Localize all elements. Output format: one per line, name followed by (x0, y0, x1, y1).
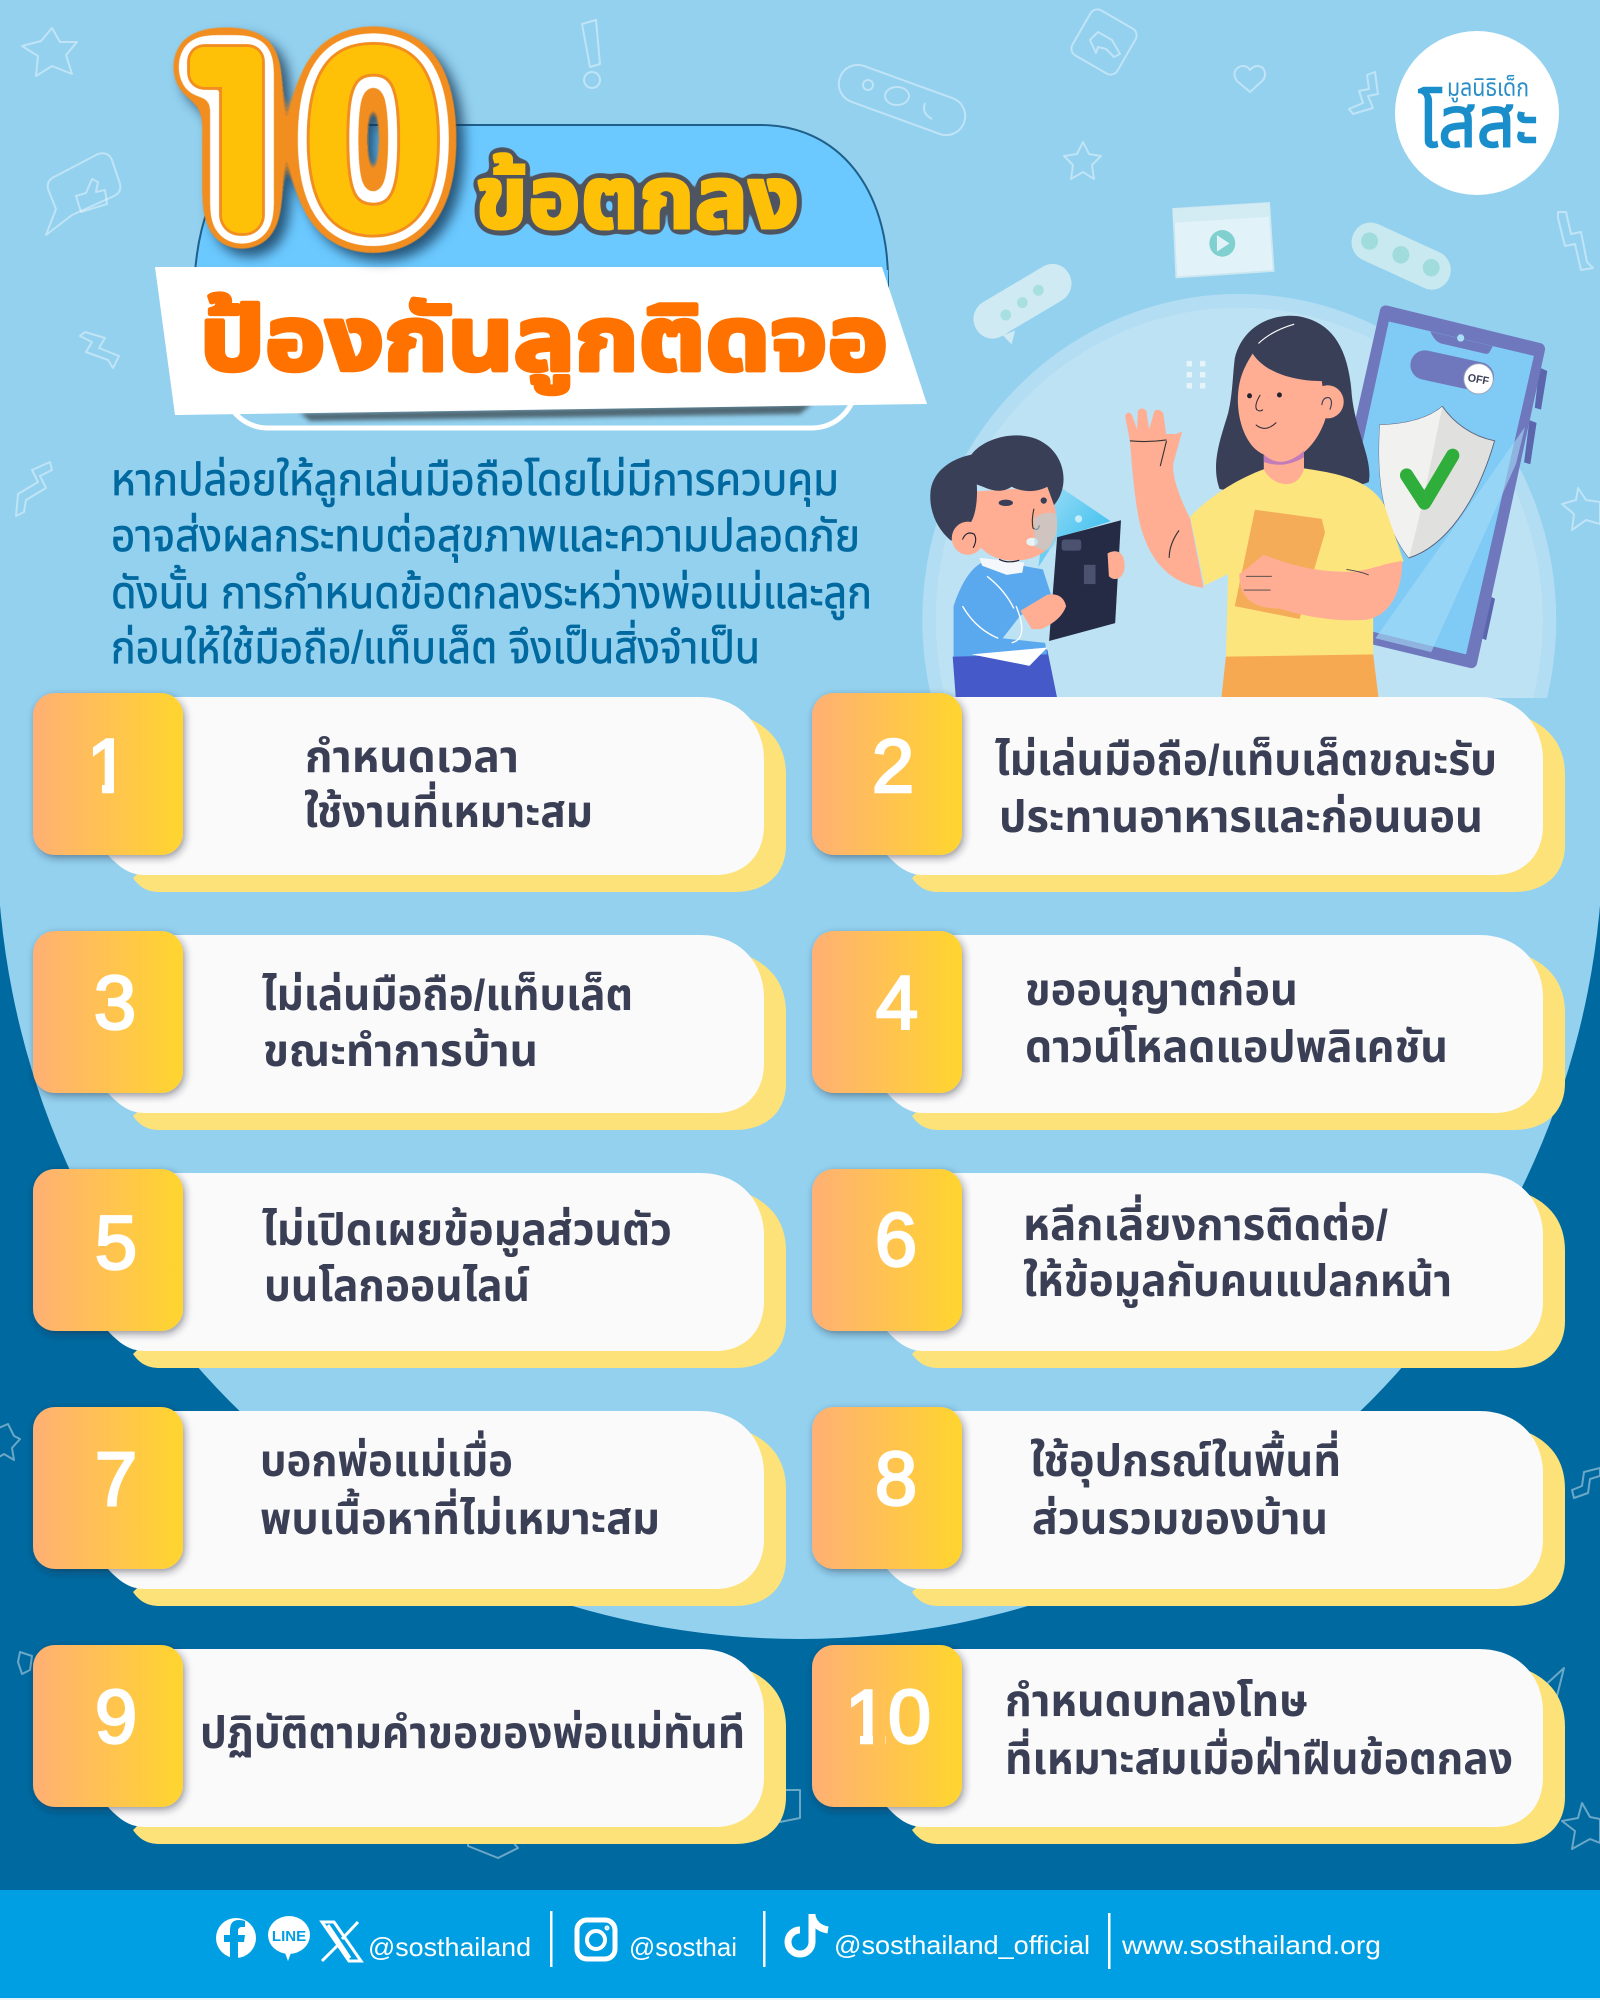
card 10: กำหนดบทลงโทษ (1005, 1677, 1308, 1726)
card 3: ขณะทำการบ้าน (263, 1027, 538, 1076)
card 4: ขออนุญาตก่อน (1025, 966, 1298, 1017)
card 3 (33, 931, 786, 1130)
website: www.sosthailand.org (1121, 1930, 1381, 1960)
card 5: 5 (95, 1201, 137, 1286)
title block (155, 0, 927, 428)
illustration: child with tablet (930, 435, 1125, 698)
illustration: mother (1125, 316, 1404, 698)
card 8: ใช้อุปกรณ์ในพื้นที่ (1030, 1430, 1341, 1488)
icon: facebook (216, 1918, 256, 1958)
title: ข้อตกลง: ข้อตกลง (475, 150, 799, 247)
card 6 (812, 1169, 1565, 1368)
icon: reaction pill (1352, 222, 1451, 290)
card 1: ใช้งานที่เหมาะสม (304, 781, 593, 837)
card 7: 7 (95, 1437, 137, 1522)
intro paragraph: ดังนั้น การกำหนดข้อตกลงระหว่างพ่อแม่และลูก (111, 565, 872, 620)
card 1: 1 (87, 724, 129, 809)
card 9: ปฏิบัติตามคำขอของพ่อแม่ทันที (200, 1709, 745, 1758)
handle: @sosthailand: @sosthailand (368, 1932, 531, 1962)
illustration: mother and child with phone (929, 203, 1550, 939)
intro paragraph: อาจส่งผลกระทบต่อสุขภาพและความปลอดภัย (111, 510, 860, 563)
title: white tilted banner (155, 267, 927, 415)
card 9 (33, 1645, 786, 1844)
card 4: ดาวน์โหลดแอปพลิเคชัน (1025, 1023, 1448, 1072)
title: banner shadow (300, 404, 812, 421)
logo: มูลนิธิเด็ก โสสะ: มูลนิธิเด็ก (1447, 74, 1529, 103)
card 4 (812, 931, 1565, 1130)
card 8 (812, 1407, 1565, 1606)
card 10 (812, 1645, 1565, 1844)
card 3: ไม่เล่นมือถือ/แท็บเล็ต (262, 971, 633, 1020)
card 1 (33, 693, 786, 892)
card 7: บอกพ่อแม่เมื่อ (260, 1430, 513, 1486)
title: ป้องกันลูกติดจอ: ป้องกันลูกติดจอ (200, 290, 888, 394)
icon: chat pill with dots (974, 264, 1072, 344)
logo: มูลนิธิเด็ก โสสะ: โสสะ (1418, 83, 1538, 163)
intro paragraph (111, 454, 872, 673)
divider (1108, 1913, 1110, 1969)
handle: @sosthailand_official: @sosthailand_official (834, 1930, 1090, 1960)
card 2: ประทานอาหารและก่อนนอน (999, 793, 1483, 842)
footer bar (0, 1890, 1600, 2000)
icon: smartphone (1315, 311, 1547, 662)
card 7 (33, 1407, 786, 1606)
card 2: 2 (872, 724, 914, 809)
card 9: 9 (95, 1675, 137, 1760)
card 6: หลีกเลี่ยงการติดต่อ/ (1023, 1194, 1388, 1250)
card 7: พบเนื้อหาที่ไม่เหมาะสม (260, 1488, 660, 1544)
card 4: 4 (876, 961, 918, 1046)
card 2 (812, 693, 1565, 892)
card 8: ส่วนรวมของบ้าน (1032, 1495, 1328, 1544)
title: tab panel (224, 300, 856, 428)
title: number 10 (172, 26, 473, 270)
icon: tiktok (788, 1914, 828, 1954)
intro paragraph: ก่อนให้ใช้มือถือ/แท็บเล็ต จึงเป็นสิ่งจำเป็น (111, 620, 760, 673)
icon: line: LINE (272, 1928, 306, 1945)
card 6: ให้ข้อมูลกับคนแปลกหน้า (1023, 1257, 1452, 1308)
divider (763, 1911, 766, 1967)
card 1: กำหนดเวลา (305, 733, 519, 782)
card 6: 6 (875, 1198, 917, 1283)
icon: line (268, 1916, 310, 1961)
icon: video window (1173, 203, 1274, 277)
illustration: bubble backdrop (922, 294, 1556, 698)
icon: instagram (577, 1920, 615, 1959)
icon: shield with check (1379, 406, 1495, 558)
icon: x (322, 1922, 361, 1961)
card 3: 3 (94, 961, 136, 1046)
card 5 (33, 1169, 786, 1368)
card 8: 8 (875, 1437, 917, 1522)
handle: @sosthai: @sosthai (629, 1932, 737, 1962)
decorative dots (1187, 361, 1205, 388)
divider (550, 1911, 552, 1967)
card 5: ไม่เปิดเผยข้อมูลส่วนตัว (262, 1206, 672, 1257)
icon: smartphone: OFF (1467, 372, 1490, 388)
logo: มูลนิธิเด็ก โสสะ (1395, 31, 1559, 195)
card 10: ที่เหมาะสมเมื่อฝ่าฝืนข้อตกลง (1005, 1728, 1513, 1784)
card 5: บนโลกออนไลน์ (264, 1262, 530, 1311)
intro paragraph: หากปล่อยให้ลูกเล่นมือถือโดยไม่มีการควบคุม (111, 454, 839, 507)
card 2: ไม่เล่นมือถือ/แท็บเล็ตขณะรับ (995, 736, 1497, 785)
card 10: 10 (845, 1675, 931, 1760)
